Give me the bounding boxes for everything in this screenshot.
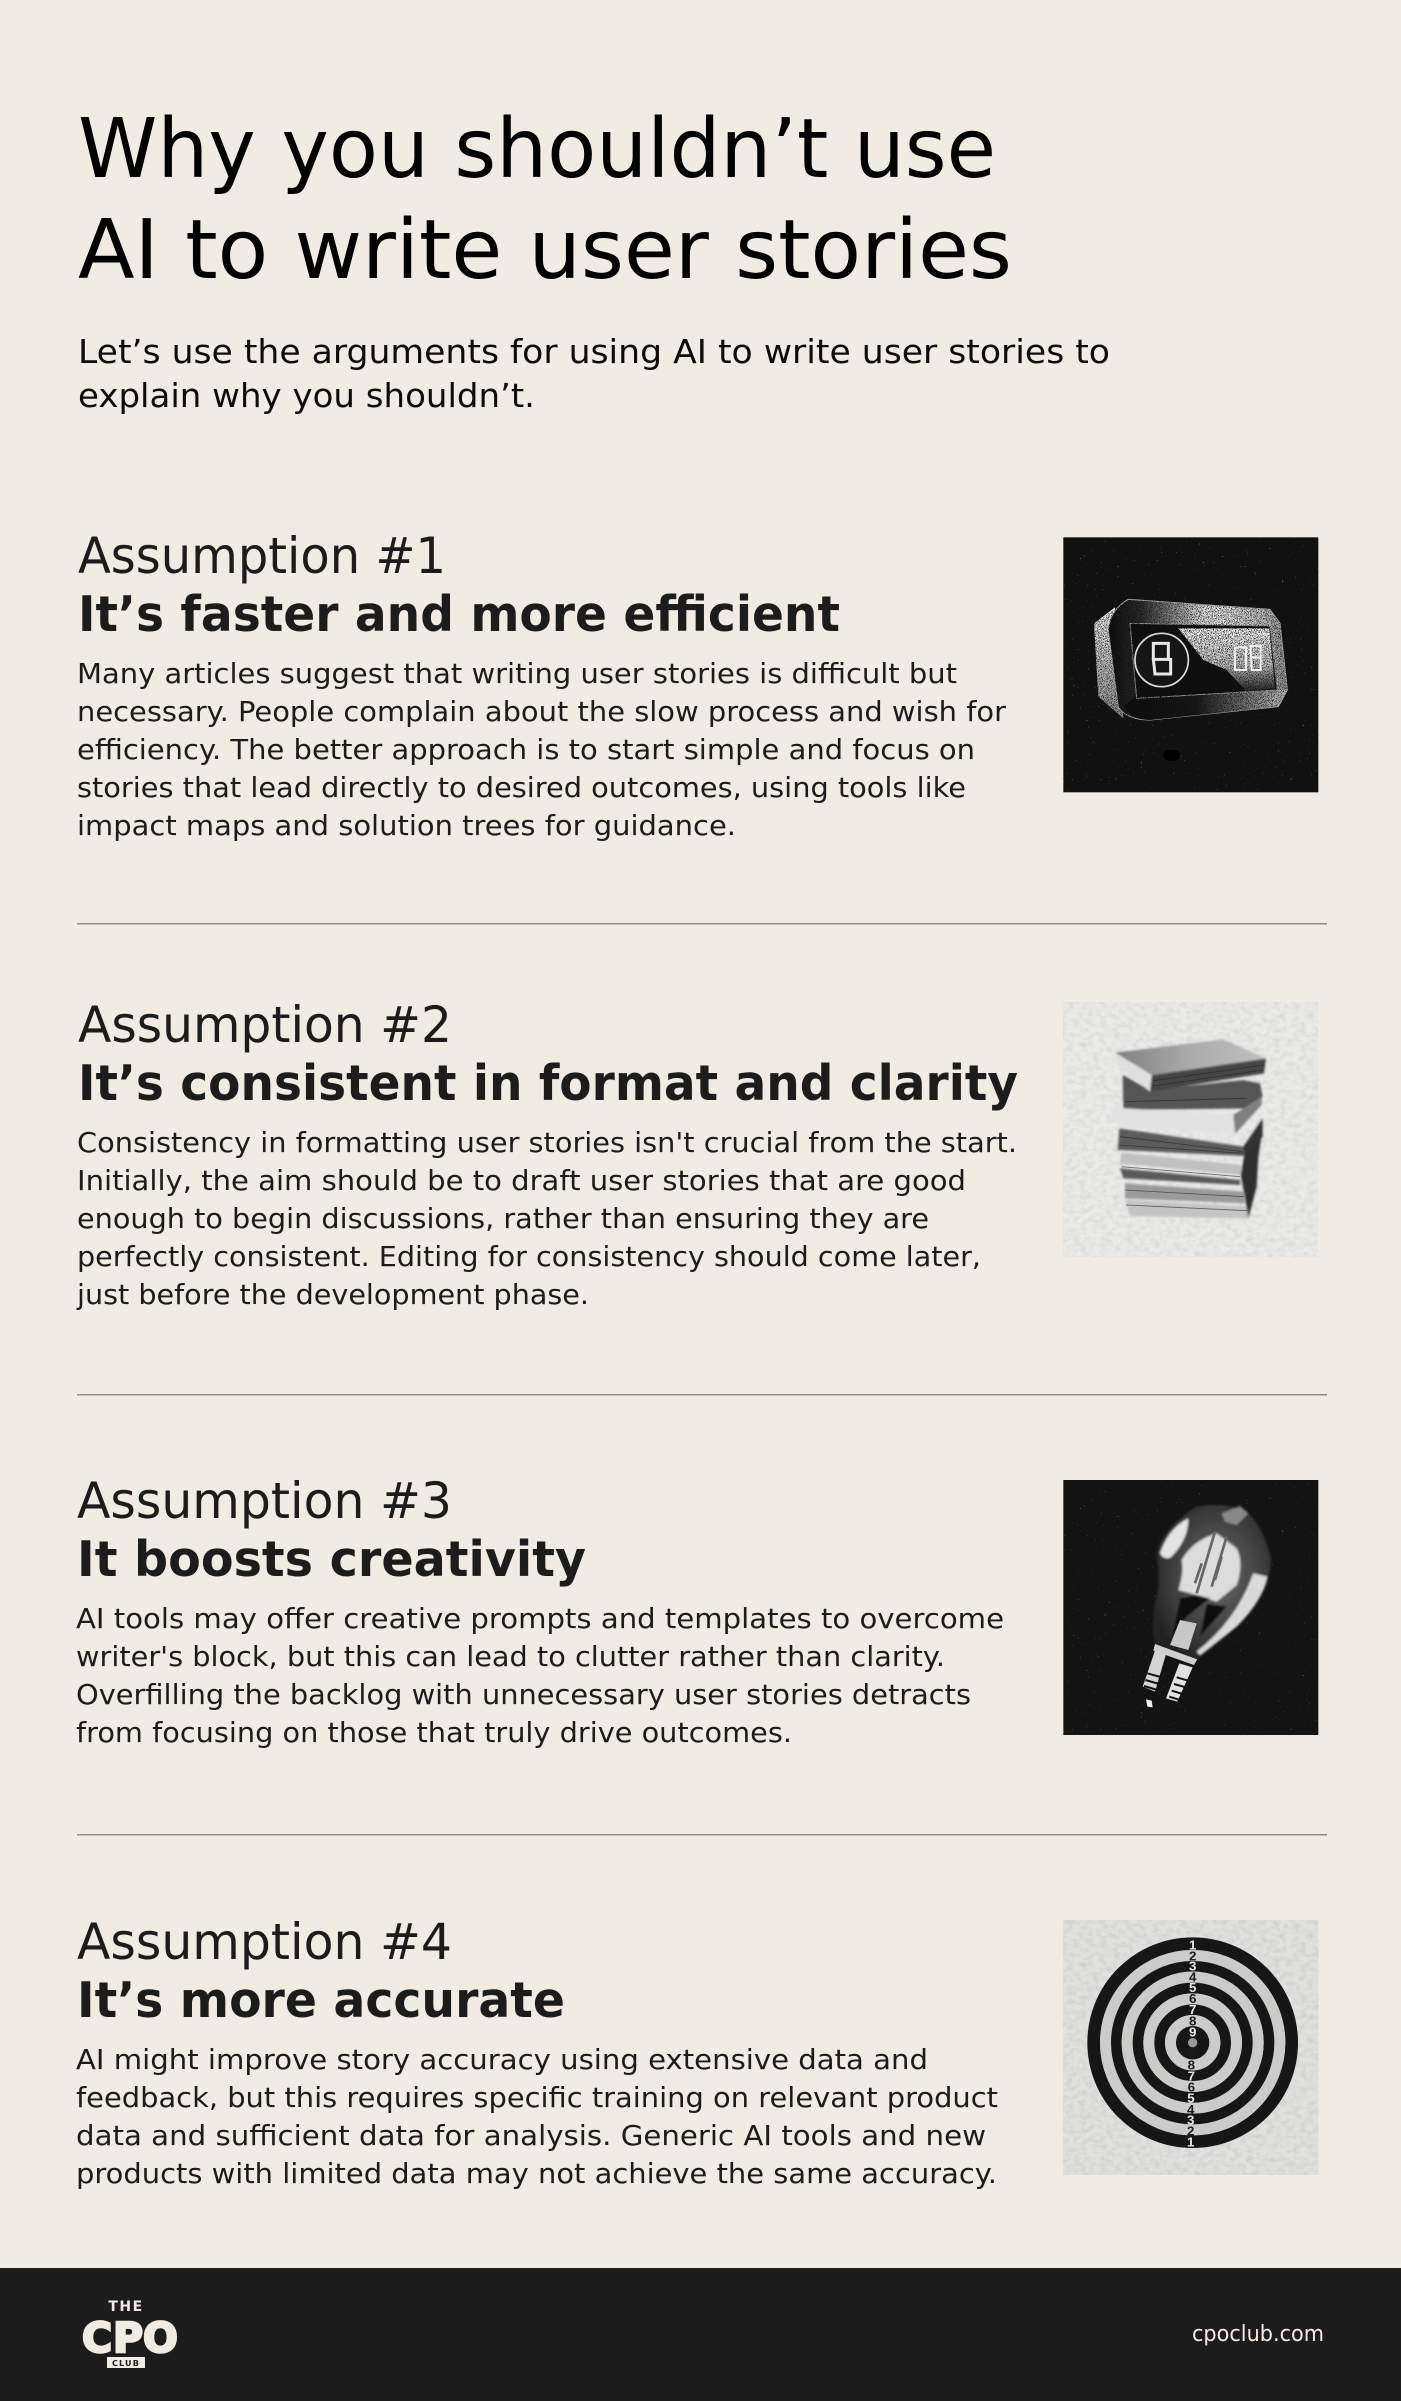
text block: assumption 2: enough to begin discussions, rather than ensuring they are: [77, 1203, 929, 1235]
text block: assumption 1: impact maps and solution trees for guidance.: [77, 810, 736, 842]
heading: assumption 2: Assumption #2: [78, 996, 452, 1054]
icon: target: 5: [1187, 2090, 1195, 2105]
text block: assumption 2: Initially, the aim should be to draft user stories that are good: [77, 1165, 966, 1197]
text block: assumption 2: [76, 1127, 1017, 1311]
text block: assumption 1: necessary. People complain about the slow process and wish for: [77, 696, 1007, 728]
logo: The CPO Club: THE: [108, 2299, 144, 2315]
text block: assumption 4: products with limited data may not achieve the same accuracy.: [76, 2158, 997, 2190]
text block: assumption 2: perfectly consistent. Editing for consistency should come later,: [77, 1241, 981, 1273]
icon: target: 6: [1188, 2079, 1195, 2094]
text block: assumption 4: feedback, but this requires specific training on relevant product: [76, 2082, 998, 2114]
website: cpoclub.com: [1192, 2322, 1324, 2347]
icon: target: 7: [1189, 2002, 1196, 2017]
text block: assumption 3: from focusing on those that truly drive outcomes.: [76, 1717, 792, 1749]
icon: target: 3: [1187, 2113, 1194, 2128]
heading: assumption 1: It’s faster and more efficient: [78, 586, 840, 643]
intro text: [78, 332, 1110, 415]
text block: assumption 3: Overfilling the backlog with unnecessary user stories detracts: [76, 1679, 971, 1711]
heading: assumption 4: [77, 1913, 565, 2029]
text block: assumption 3: [76, 1603, 1004, 1749]
text block: assumption 1: Many articles suggest that writing user stories is difficult but: [77, 658, 957, 690]
text block: assumption 3: writer's block, but this can lead to clutter rather than clarity.: [76, 1641, 945, 1673]
icon: target: 3: [1189, 1959, 1196, 1974]
text block: assumption 4: [76, 2044, 998, 2190]
heading: assumption 4: It’s more accurate: [77, 1972, 565, 2029]
text block: assumption 1: [77, 658, 1007, 842]
icon: target: [1063, 1920, 1318, 2175]
icon: target: 2: [1187, 2123, 1194, 2138]
icon: target: 6: [1189, 1991, 1196, 2006]
heading: assumption 3: It boosts creativity: [77, 1531, 586, 1588]
heading: assumption 1: [78, 527, 840, 643]
text block: assumption 1: efficiency. The better approach is to start simple and focus on: [77, 734, 975, 766]
footer: [0, 2268, 1401, 2401]
text block: assumption 4: data and sufficient data for analysis. Generic AI tools and new: [76, 2120, 986, 2152]
divider: [77, 1394, 1327, 1396]
text block: assumption 4: AI might improve story accuracy using extensive data and: [76, 2044, 928, 2076]
heading: assumption 4: Assumption #4: [77, 1913, 452, 1971]
icon: target: 8: [1189, 2013, 1196, 2028]
text block: assumption 2: just before the development phase.: [76, 1279, 589, 1311]
panel: assumption 1: [77, 527, 1318, 842]
icon: target: 4: [1189, 1969, 1197, 1984]
heading: assumption 1: Assumption #1: [78, 527, 446, 585]
text block: assumption 3: AI tools may offer creative prompts and templates to overcome: [76, 1603, 1004, 1635]
heading: assumption 3: Assumption #3: [77, 1472, 452, 1530]
divider: [77, 923, 1327, 924]
text block: assumption 1: stories that lead directly to desired outcomes, using tools like: [77, 772, 966, 804]
title: [78, 102, 1012, 298]
icon: stack of books: [1063, 1002, 1318, 1257]
icon: digital clock: [1063, 537, 1318, 792]
divider: [77, 1834, 1327, 1836]
icon: target: 1: [1189, 1938, 1197, 1953]
panel: assumption 3: [76, 1472, 1318, 1749]
title: Why you shouldn’t use: [78, 102, 996, 197]
heading: assumption 3: [77, 1472, 586, 1588]
logo: The CPO Club: [82, 2299, 178, 2368]
icon: target: 1: [1187, 2134, 1195, 2149]
intro text: explain why you shouldn’t.: [78, 376, 535, 415]
icon: target: 2: [1189, 1949, 1196, 1964]
panel: assumption 2: [76, 996, 1318, 1311]
icon: target: 4: [1187, 2102, 1195, 2117]
title: AI to write user stories: [78, 203, 1012, 298]
text block: assumption 2: Consistency in formatting user stories isn't crucial from the start.: [77, 1127, 1017, 1159]
icon: light bulb: [1063, 1480, 1318, 1735]
icon: target: 9: [1189, 2024, 1196, 2039]
panel: assumption 4: [76, 1913, 1318, 2190]
logo: The CPO Club: CPO: [82, 2314, 178, 2362]
intro text: Let’s use the arguments for using AI to write user stories to: [78, 332, 1110, 371]
heading: assumption 2: [78, 996, 1018, 1112]
icon: target: 9: [1188, 2046, 1196, 2061]
logo: The CPO Club: CLUB: [112, 2359, 140, 2368]
heading: assumption 2: It’s consistent in format and clarity: [78, 1055, 1018, 1112]
icon: target: 7: [1188, 2068, 1195, 2083]
icon: target: 8: [1188, 2058, 1195, 2073]
icon: target: 5: [1189, 1980, 1197, 1995]
